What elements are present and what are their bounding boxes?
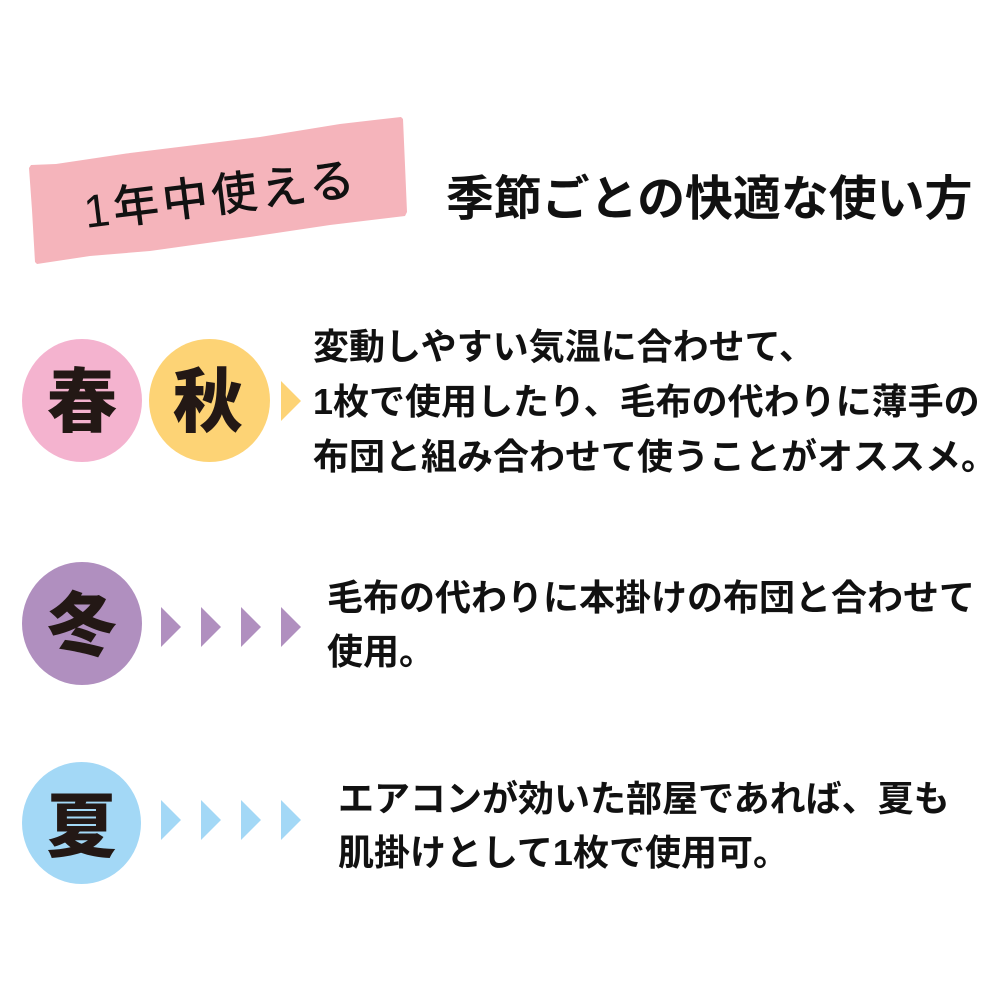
spring circle: 春	[47, 346, 117, 446]
summer circle	[22, 762, 141, 884]
summer text: エアコンが効いた部屋であれば、夏も	[338, 778, 950, 819]
winter circle	[22, 562, 142, 685]
winter text	[327, 577, 975, 672]
handwritten tape text: 1年中使える	[81, 153, 361, 238]
summer text: 肌掛けとして1枚で使用可。	[338, 832, 789, 873]
summer text	[338, 778, 950, 873]
winter text: 使用。	[327, 631, 435, 672]
title: 季節ごとの快適な使い方	[446, 173, 972, 226]
spring autumn text: 布団と組み合わせて使うことがオススメ。	[313, 436, 997, 477]
winter text: 毛布の代わりに本掛けの布団と合わせて	[327, 577, 975, 618]
autumn circle: 秋	[173, 346, 243, 446]
spring autumn text	[313, 326, 997, 477]
summer circle: 夏	[46, 771, 116, 872]
spring autumn text: 変動しやすい気温に合わせて、	[313, 326, 815, 367]
spring autumn text: 1枚で使用したり、毛布の代わりに薄手の	[313, 381, 980, 422]
tape label	[29, 117, 407, 264]
autumn circle	[149, 339, 270, 462]
winter circle: 冬	[47, 570, 117, 670]
spring circle	[22, 339, 142, 462]
